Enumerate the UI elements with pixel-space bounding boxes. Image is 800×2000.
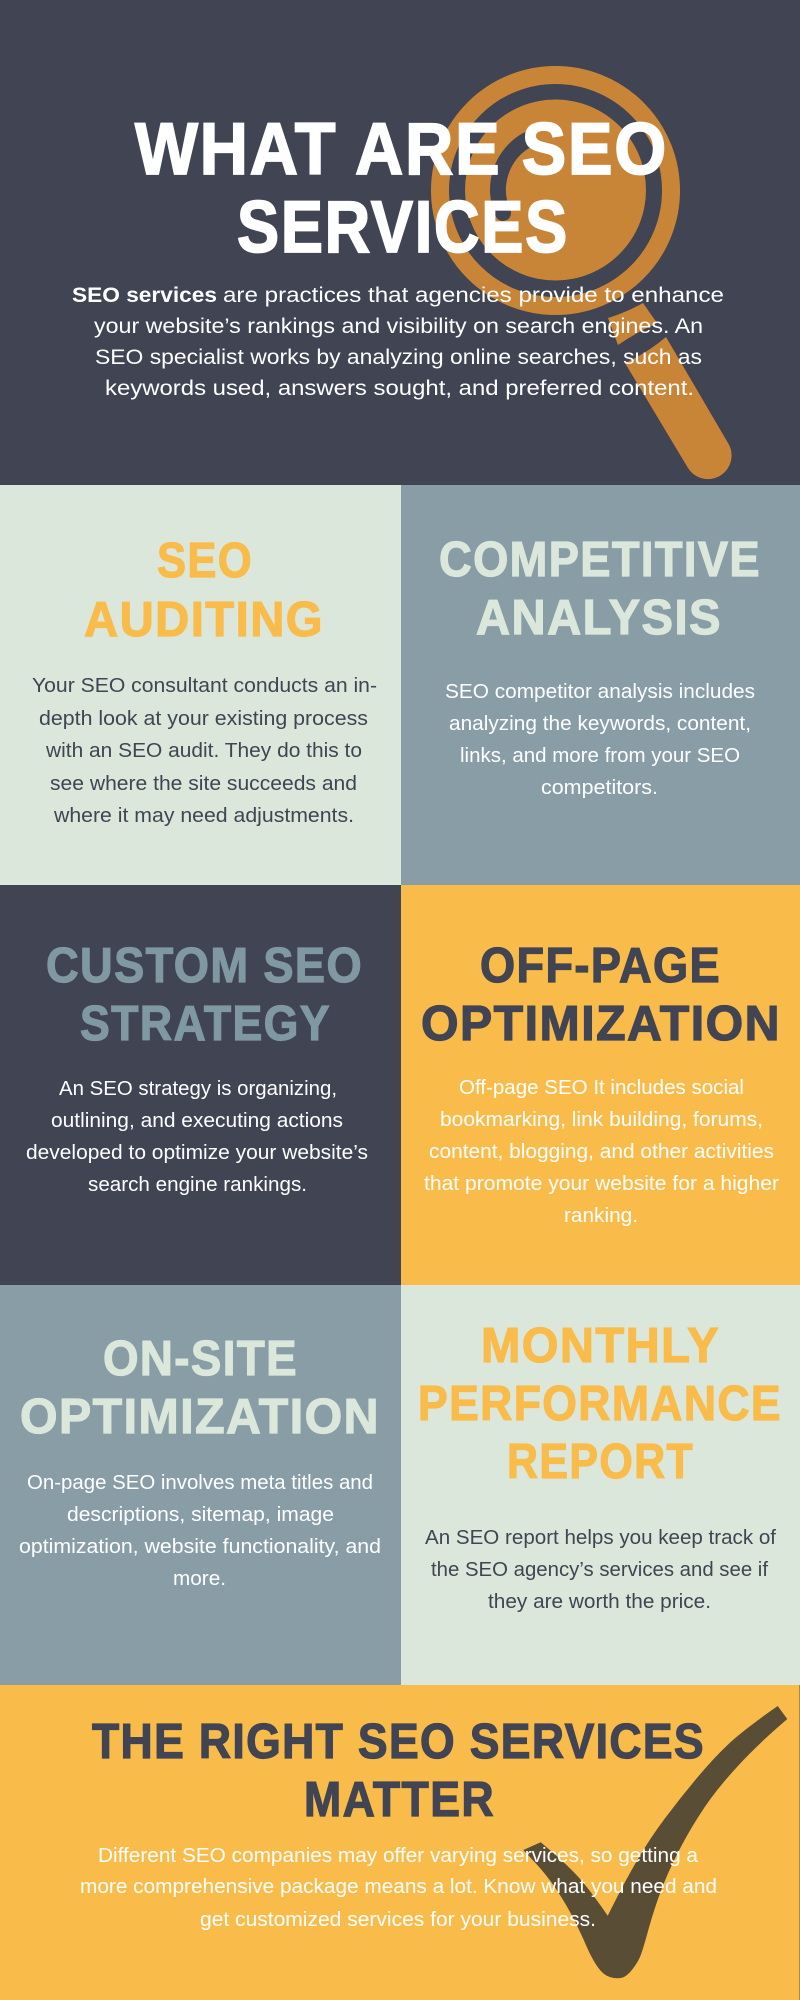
text: off-page optimization: ranking. (564, 1204, 638, 1227)
text: SEO auditing: with an SEO audit. They do this to (45, 739, 362, 762)
text: footer: more comprehensive package means a lot. Know what you need and (80, 1875, 717, 1898)
text: custom SEO strategy: developed to optimize your website’s (26, 1141, 368, 1164)
text: on-site optimization: descriptions, sitemap, image (67, 1503, 334, 1526)
heading: off-page optimization (421, 939, 781, 1051)
intro text (72, 284, 724, 400)
heading: SEO auditing (84, 534, 324, 647)
text: off-page optimization: bookmarking, link building, forums, (440, 1108, 763, 1131)
panel: monthly performance report (401, 1285, 800, 1685)
heading: on-site optimization: OPTIMIZATION (20, 1390, 380, 1444)
intro text: are practices that agencies provide to enhance (223, 284, 724, 307)
intro text: keywords used, answers sought, and preferred content. (105, 377, 694, 400)
heading: footer (92, 1715, 705, 1827)
text: monthly performance report (425, 1526, 776, 1613)
text: SEO auditing: see where the site succeeds and (50, 772, 357, 795)
text: competitive analysis: competitors. (541, 776, 658, 799)
heading: monthly performance report: REPORT (507, 1435, 694, 1489)
heading: on-site optimization: ON-SITE (103, 1332, 298, 1386)
text: footer: get customized services for your business. (200, 1908, 596, 1931)
text: SEO auditing: where it may need adjustments. (53, 804, 354, 827)
text: custom SEO strategy: outlining, and executing actions (51, 1109, 343, 1132)
panel: header (0, 0, 800, 485)
text: on-site optimization: more. (173, 1567, 226, 1590)
heading: footer: THE RIGHT SEO SERVICES (92, 1715, 705, 1769)
heading: SEO auditing: SEO (157, 534, 253, 588)
text: monthly performance report: they are worth the price. (488, 1590, 711, 1613)
text: off-page optimization: Off-page SEO It includes social (459, 1076, 744, 1099)
icon: check mark (523, 1706, 787, 1978)
panel: on-site optimization (0, 1285, 401, 1685)
text: on-site optimization (19, 1471, 381, 1590)
text: custom SEO strategy: An SEO strategy is organizing, (59, 1077, 337, 1100)
text: footer: Different SEO companies may offer varying services, so getting a (98, 1844, 699, 1867)
text: on-site optimization: optimization, website functionality, and (19, 1535, 381, 1558)
panel: off-page optimization (401, 885, 800, 1285)
heading: custom SEO strategy: CUSTOM SEO (46, 939, 363, 993)
text: custom SEO strategy: search engine rankings. (88, 1173, 307, 1196)
intro text: SEO specialist works by analyzing online searches, such as (95, 346, 702, 369)
heading: competitive analysis (439, 533, 761, 645)
text: competitive analysis: SEO competitor analysis includes (445, 680, 755, 703)
heading: SEO auditing: AUDITING (84, 593, 324, 647)
text: footer (80, 1844, 717, 1931)
text: monthly performance report: the SEO agency’s services and see if (431, 1558, 768, 1581)
heading: footer: MATTER (304, 1773, 495, 1827)
panel: footer (0, 1685, 800, 2000)
heading: on-site optimization (20, 1332, 380, 1444)
title (135, 109, 668, 268)
intro text: your website’s rankings and visibility on search engines. An (94, 315, 703, 338)
text: SEO auditing: Your SEO consultant conducts an in- (32, 674, 377, 697)
heading: competitive analysis: COMPETITIVE (439, 533, 761, 587)
title: WHAT ARE SEO (135, 109, 668, 190)
text: off-page optimization (424, 1076, 779, 1227)
panel: competitive analysis (401, 485, 800, 885)
intro text: SEO services (72, 284, 217, 307)
text: competitive analysis: analyzing the keywords, content, (449, 712, 751, 735)
title: SERVICES (237, 187, 569, 268)
icon: magnifying glass (440, 75, 732, 479)
text: off-page optimization: that promote your website for a higher (424, 1172, 779, 1195)
text: off-page optimization: content, blogging, and other activities (429, 1140, 774, 1163)
text: on-site optimization: On-page SEO involves meta titles and (27, 1471, 373, 1494)
text: monthly performance report: An SEO report helps you keep track of (425, 1526, 776, 1549)
text: SEO auditing: depth look at your existing process (39, 707, 368, 730)
heading: custom SEO strategy (46, 939, 363, 1051)
heading: monthly performance report (418, 1319, 782, 1489)
heading: competitive analysis: ANALYSIS (476, 591, 722, 645)
panel: custom SEO strategy (0, 885, 401, 1285)
heading: off-page optimization: OFF-PAGE (480, 939, 721, 993)
heading: custom SEO strategy: STRATEGY (80, 997, 331, 1051)
text: custom SEO strategy (26, 1077, 368, 1196)
text: competitive analysis (445, 680, 755, 799)
panel: SEO auditing (0, 485, 401, 885)
text: SEO auditing (32, 674, 377, 827)
text: competitive analysis: links, and more from your SEO (460, 744, 740, 767)
heading: off-page optimization: OPTIMIZATION (421, 997, 781, 1051)
heading: monthly performance report: MONTHLY (481, 1319, 720, 1373)
